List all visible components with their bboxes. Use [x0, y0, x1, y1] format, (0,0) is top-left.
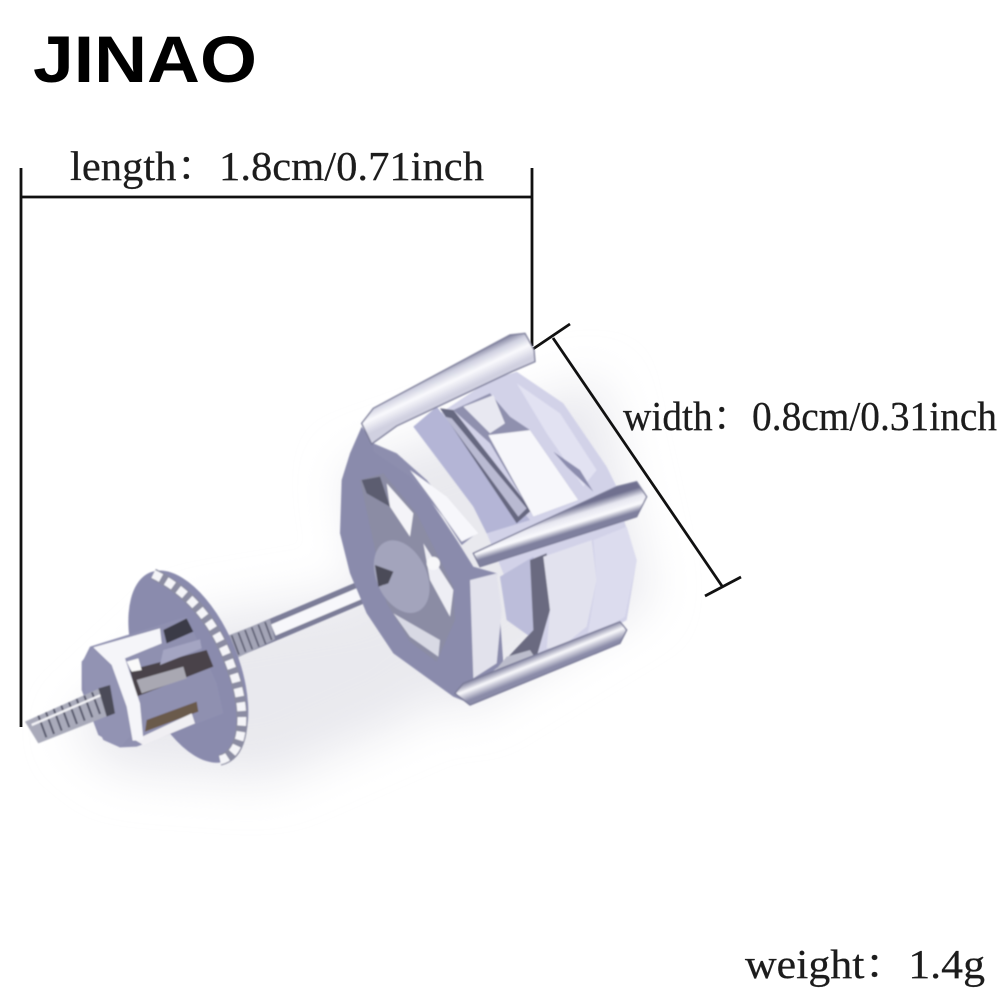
- nut cylinder: [82, 617, 223, 747]
- back plate: [340, 427, 503, 703]
- length bracket: [21, 168, 532, 727]
- upper left band: [373, 407, 532, 545]
- nut highlight band: [93, 628, 162, 741]
- nut end cap: [82, 648, 130, 747]
- width bracket: [533, 324, 741, 596]
- earring illustration: [25, 333, 647, 780]
- width dimension: [533, 324, 997, 596]
- threaded tip: [25, 685, 115, 743]
- post: [223, 572, 410, 659]
- bottom prong: [455, 622, 627, 705]
- upper right band: [453, 393, 578, 517]
- lower bands: [470, 540, 597, 678]
- gallery openwork: [360, 473, 455, 662]
- stud head: [340, 333, 647, 705]
- background shadow: [70, 380, 650, 780]
- front prong: [473, 482, 647, 567]
- back disc: [104, 554, 273, 780]
- top prong: [362, 333, 535, 444]
- weight label: weight：1.4g: [745, 941, 985, 987]
- length dimension: [21, 143, 532, 727]
- stone: [430, 372, 637, 653]
- length label: length：1.8cm/0.71inch: [70, 143, 484, 189]
- screw back and post: [25, 554, 410, 780]
- title: JINAO: [33, 22, 257, 96]
